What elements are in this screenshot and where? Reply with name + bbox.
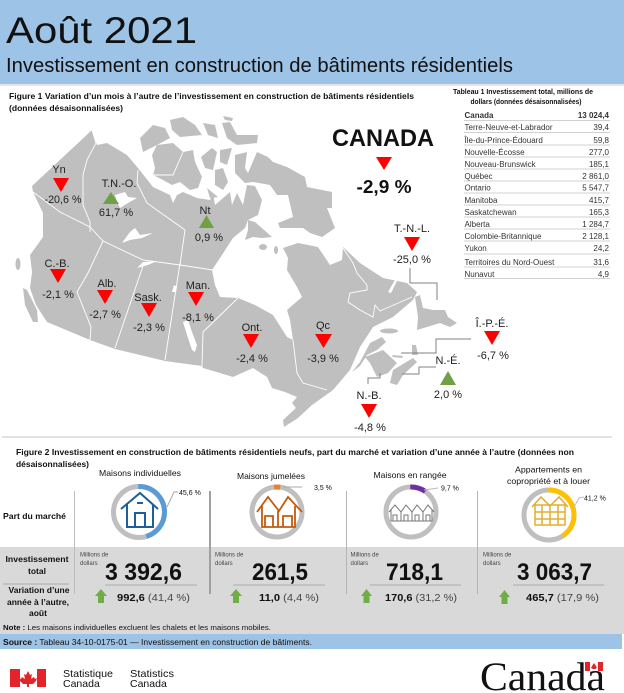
- national figure: Canada: CANADA: [332, 125, 434, 152]
- map label: New Brunswick: -4,8 %: [354, 422, 386, 434]
- map label: Nova Scotia: [434, 354, 462, 401]
- donut: 3,5 %: [250, 485, 304, 539]
- map label: Saskatchewan: -2,3 %: [133, 322, 165, 334]
- row labels: août: [29, 608, 47, 618]
- table 1: Canada: [464, 111, 494, 120]
- column: appartements: 465,7 (17,9 %): [526, 592, 599, 604]
- figure 2 heading: désaisonnalisées): [16, 459, 89, 469]
- map label: Manitoba: Man.: [186, 280, 210, 292]
- map label: Newfoundland and Labrador: T.-N.-L.: [394, 223, 430, 235]
- row labels: année à l’autre,: [7, 597, 69, 607]
- map label: Nova Scotia: N.-É.: [435, 354, 461, 367]
- map label: Nova Scotia: 2,0 %: [434, 389, 462, 401]
- map label: Alberta: Alb.: [98, 278, 116, 290]
- table 1: Terre-Neuve-et-Labrador: [464, 123, 553, 132]
- table 1: 2 128,1: [582, 232, 610, 241]
- icon: row houses: [389, 505, 434, 521]
- column: maisons jumelées: 261,5: [252, 559, 308, 586]
- map label: Prince Edward Island: [475, 317, 509, 362]
- figure 2 heading: Figure 2 Investissement en construction de bâtiments résidentiels neufs, part du marché et variation d’une année à l’autre (données non: [16, 447, 574, 457]
- column: maisons jumelées: Millions de: [215, 552, 244, 558]
- column: appartements: dollars: [483, 561, 501, 567]
- map label: British Columbia: [42, 258, 74, 301]
- Statistics Canada logo: Statistique: [63, 668, 113, 680]
- table 1: Ontario: [464, 184, 491, 192]
- table 1: 59,8: [593, 136, 610, 145]
- column: maisons en rangée: 718,1: [386, 559, 443, 586]
- donut: 9,7 %: [386, 487, 436, 537]
- map label: Northwest Territories: 61,7 %: [99, 207, 133, 219]
- table 1: Nouveau-Brunswick: [464, 160, 537, 169]
- column: appartements: Millions de: [483, 552, 512, 558]
- title: Août 2021: [6, 10, 197, 51]
- map label: Ontario: -2,4 %: [236, 353, 268, 365]
- column: maisons jumelées: dollars: [215, 561, 233, 567]
- figure 1 heading: [9, 91, 414, 113]
- table 1: [453, 89, 610, 279]
- column: maisons individuelles: Maisons individuelles: [99, 468, 181, 478]
- arrow up: [499, 590, 510, 604]
- map label: Yukon: -20,6 %: [44, 194, 82, 206]
- column: maisons jumelées: Maisons jumelées: [237, 471, 305, 481]
- column: maisons jumelées: 11,0 (4,4 %): [259, 592, 319, 604]
- map label: Saskatchewan: [133, 292, 165, 334]
- subtitle: Investissement en construction de bâtiments résidentiels: [6, 55, 513, 77]
- icon: Canadian flag: [10, 669, 46, 687]
- arrow up: [95, 589, 107, 603]
- table 1: Île-du-Prince-Édouard: [464, 136, 543, 145]
- table 1: Manitoba: [464, 196, 498, 205]
- row labels: Variation d’une: [8, 585, 70, 595]
- map label: Quebec: [307, 320, 339, 365]
- arrow up: [230, 589, 242, 603]
- table 1: Québec: [464, 172, 493, 181]
- map label: Newfoundland and Labrador: -25,0 %: [393, 254, 431, 266]
- source band: [0, 634, 622, 649]
- map label: Nunavut: [195, 205, 223, 244]
- table title: [453, 89, 593, 106]
- icon: apartment building: [532, 497, 568, 525]
- column: maisons individuelles: [80, 468, 201, 604]
- column: maisons jumelées: [215, 471, 332, 604]
- row labels: Investissement: [6, 554, 69, 564]
- table 1: 1 284,7: [582, 220, 610, 229]
- icon: wordmark flag: [585, 662, 603, 671]
- map label: Northwest Territories: T.N.-O.: [102, 178, 136, 190]
- column: maisons individuelles: dollars: [80, 561, 98, 567]
- header band: [0, 0, 624, 86]
- column: appartements: Appartements en: [515, 464, 582, 474]
- row labels: Part du marché: [3, 511, 66, 521]
- column: maisons en rangée: 9,7 %: [441, 486, 459, 492]
- table 1: Yukon: [464, 244, 487, 253]
- table 1: 415,7: [589, 196, 610, 205]
- table 1: 2 861,0: [582, 172, 610, 181]
- map label: New Brunswick: N.-B.: [356, 390, 382, 402]
- table 1: Saskatchewan: [464, 208, 517, 217]
- map label: Quebec: -3,9 %: [307, 353, 339, 365]
- table title: dollars (données désaisonnalisées): [470, 99, 582, 106]
- map label: Alberta: [89, 278, 121, 321]
- figure 2 heading: [16, 447, 574, 469]
- map label: Prince Edward Island: Î.-P.-É.: [475, 317, 508, 330]
- Statistics Canada logo: Canada: [130, 678, 167, 690]
- table 1: Nunavut: [464, 270, 495, 279]
- column dividers: [74, 491, 478, 594]
- column: maisons en rangée: 170,6 (31,2 %): [385, 592, 457, 604]
- table 1: 277,0: [589, 148, 610, 157]
- map label: Quebec: Qc: [316, 320, 331, 332]
- Statistics Canada logo: Canada: [63, 678, 100, 690]
- table 1: Alberta: [464, 220, 490, 229]
- table 1: 165,3: [589, 208, 610, 217]
- table title: Tableau 1 Investissement total, millions de: [453, 89, 593, 96]
- table 1: Territoires du Nord-Ouest: [464, 258, 555, 267]
- column: maisons jumelées: 3,5 %: [314, 485, 332, 492]
- column: appartements: 41,2 %: [584, 496, 606, 502]
- map label: Prince Edward Island: -6,7 %: [477, 350, 509, 362]
- map label: Manitoba: [182, 280, 214, 324]
- map label: Newfoundland and Labrador: [393, 223, 431, 266]
- arrow up: [361, 589, 372, 603]
- table 1: 185,1: [589, 160, 610, 169]
- map label: British Columbia: C.-B.: [44, 258, 70, 270]
- Statistics Canada logo: Statistics: [130, 668, 174, 680]
- map label: Ontario: [236, 322, 268, 365]
- source band: Source : Tableau 34-10-0175-01 — Investissement en construction de bâtiments.: [3, 638, 312, 647]
- table 1: 31,6: [593, 258, 610, 267]
- column: maisons en rangée: [350, 470, 461, 604]
- map label: Nunavut: Nt: [200, 205, 210, 217]
- table 1: 24,2: [593, 244, 610, 253]
- national figure: Canada: -2,9 %: [356, 177, 412, 197]
- leader lines for Atlantic provinces: [368, 268, 471, 384]
- row labels: total: [28, 566, 46, 576]
- table 1: Nouvelle-Écosse: [464, 148, 525, 157]
- table 1: 4,9: [598, 270, 610, 279]
- icon: semi-detached houses: [257, 497, 302, 527]
- map label: British Columbia: -2,1 %: [42, 289, 74, 301]
- map label: Manitoba: -8,1 %: [182, 312, 214, 324]
- map label: Northwest Territories: [99, 178, 136, 219]
- note: Note : Les maisons individuelles excluent les chalets et les maisons mobiles.: [3, 623, 271, 632]
- map label: Ontario: Ont.: [242, 322, 262, 334]
- map of Canada: [16, 116, 457, 427]
- map label: Saskatchewan: Sask.: [134, 292, 162, 304]
- table 1: 39,4: [593, 123, 610, 132]
- column: appartements: copropriété et à louer: [507, 476, 590, 486]
- icon: house: [121, 493, 158, 527]
- row labels: [3, 511, 70, 618]
- figure 1 heading: (données désaisonnalisées): [9, 103, 123, 113]
- map label: Nunavut: 0,9 %: [195, 232, 223, 244]
- figure 1 heading: Figure 1 Variation d’un mois à l’autre de l’investissement en construction de bâtiments résidentiels: [9, 91, 414, 101]
- grey data band: [0, 547, 624, 634]
- column: maisons en rangée: Maisons en rangée: [374, 470, 447, 480]
- map label: Yukon: [44, 164, 82, 206]
- table 1: 5 547,7: [582, 184, 610, 192]
- column: maisons individuelles: Millions de: [80, 552, 109, 558]
- map label: Yukon: Yn: [52, 164, 66, 176]
- column: maisons individuelles: 992,6 (41,4 %): [117, 592, 190, 604]
- donut: 45,6 %: [114, 486, 164, 538]
- map label: New Brunswick: [354, 390, 386, 434]
- column: appartements: [483, 464, 606, 604]
- donut: 41,2 %: [524, 490, 574, 540]
- table 1: Colombie-Britannique: [464, 232, 542, 241]
- column: appartements: 3 063,7: [517, 559, 592, 586]
- table 1: 13 024,4: [578, 111, 610, 120]
- map label: Alberta: -2,7 %: [89, 309, 121, 321]
- column: maisons individuelles: 3 392,6: [105, 559, 182, 586]
- national figure: Canada: [332, 125, 434, 197]
- Statistics Canada logo: [10, 668, 174, 690]
- column: maisons en rangée: Millions de: [350, 552, 380, 558]
- column: maisons en rangée: dollars: [350, 561, 368, 567]
- column: maisons individuelles: 45,6 %: [179, 490, 201, 497]
